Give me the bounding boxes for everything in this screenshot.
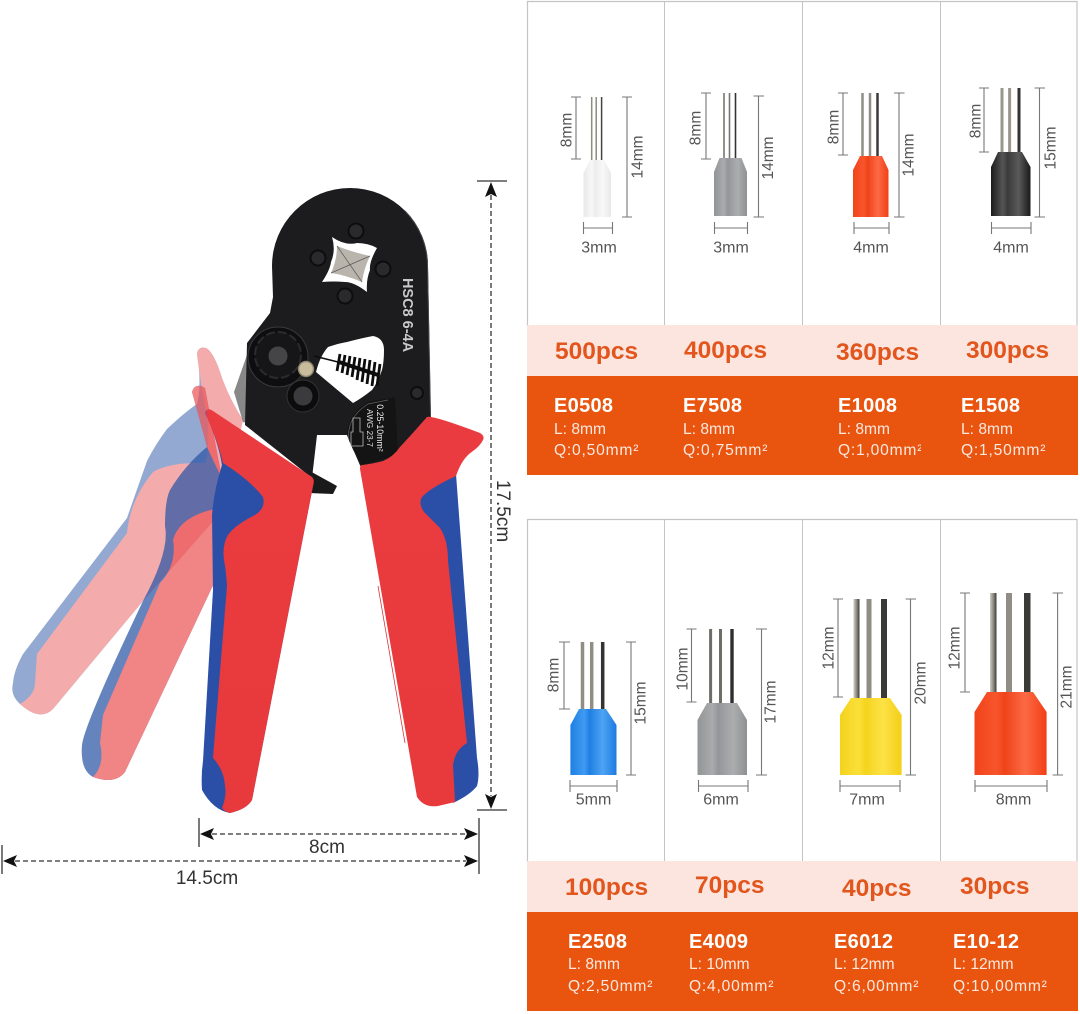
pliers illustration: [12, 188, 484, 813]
quantity band: upper row: [527, 325, 1078, 376]
quantity band: lower row: 30pcs: [960, 873, 1029, 900]
ferrule E6012 yellow: 12mm: [820, 626, 838, 670]
ferrule E7508 grey: [688, 93, 777, 256]
quantity band: upper row: 360pcs: [836, 339, 919, 366]
spec E4009: Q:4,00mm²: [689, 978, 774, 995]
adjusting wheel: [248, 327, 314, 387]
ghost handle: outermost open position: [12, 348, 243, 714]
dimension: width 8cm: [199, 818, 479, 874]
ferrule E2508 blue: 5mm: [576, 792, 611, 808]
spring: [314, 354, 380, 386]
spec band: upper row: [527, 376, 1078, 475]
ferrule E6012 yellow: 7mm: [849, 792, 885, 808]
ferrule E1008 red: 14mm: [900, 133, 918, 177]
quantity band: upper row: 400pcs: [684, 337, 767, 364]
spec E2508: [568, 931, 653, 995]
ferrule E6012 yellow: [820, 599, 930, 808]
ferrule E6012 yellow: 20mm: [912, 661, 930, 705]
ferrule E10-12 red: 8mm: [996, 792, 1031, 808]
quantity band: lower row: 100pcs: [565, 874, 648, 901]
panel: lower ferrule sizes: [528, 519, 1077, 862]
spec E1008: [838, 395, 923, 459]
dimension: width 8cm: 8cm: [309, 837, 345, 858]
spec E0508: Q:0,50mm²: [554, 442, 639, 459]
right handle: [360, 417, 484, 806]
quantity band: lower row: 70pcs: [695, 872, 764, 899]
crimping die opening: [322, 237, 377, 292]
panel: upper ferrule sizes: [528, 1, 1077, 326]
spec E7508: [683, 395, 768, 459]
head edge highlight: [405, 211, 430, 415]
spec E2508: E2508: [568, 931, 627, 953]
spring window: [316, 336, 384, 403]
spec E1008: L: 8mm: [838, 421, 890, 438]
quantity band: upper row: 300pcs: [966, 337, 1049, 364]
spec E1008: Q:1,00mm²: [838, 442, 923, 459]
ferrule E0508 white: [558, 97, 646, 256]
ferrule E1008 red: [826, 93, 918, 256]
ghost handle: middle open position: [82, 386, 225, 780]
spec E0508: L: 8mm: [554, 421, 606, 438]
wire range marking: AWG 23-7: [365, 409, 374, 447]
die screws: [310, 224, 423, 399]
spec E6012: L: 12mm: [834, 956, 895, 973]
pivot bolt: [287, 380, 319, 412]
spec E1508: E1508: [961, 395, 1020, 417]
ferrule E1508 black: 4mm: [993, 240, 1029, 256]
dimension: height 17.5cm: 17.5cm: [492, 480, 513, 542]
ferrule E2508 blue: 8mm: [546, 658, 562, 692]
small lever tab: [308, 470, 337, 494]
plier head and jaw body: [245, 188, 431, 478]
ferrule E10-12 red: 21mm: [1058, 665, 1076, 709]
spec E7508: L: 8mm: [683, 421, 735, 438]
spec E10-12: L: 12mm: [953, 956, 1014, 973]
left handle: [202, 409, 314, 813]
model text on head: HSC8 6-4A: [399, 278, 415, 353]
spec E6012: [834, 931, 919, 995]
spec E4009: [689, 931, 774, 995]
spec band: lower row: [527, 912, 1078, 1011]
spec E2508: Q:2,50mm²: [568, 978, 653, 995]
spec E4009: E4009: [689, 931, 748, 953]
spec E6012: E6012: [834, 931, 893, 953]
spec E1508: [961, 395, 1046, 459]
ferrule E7508 grey: 14mm: [760, 136, 777, 180]
dimension: height 17.5cm: [477, 181, 513, 810]
wire range marking: [347, 397, 398, 465]
dimension: open width 14.5cm: 14.5cm: [176, 868, 238, 889]
ferrule E1508 black: [968, 88, 1060, 256]
ferrule E4009 grey: 10mm: [674, 647, 692, 691]
ferrule E1008 red: 4mm: [853, 240, 889, 256]
ferrule E7508 grey: 8mm: [688, 111, 704, 145]
ferrule E4009 grey: 6mm: [703, 792, 739, 808]
ferrule E2508 blue: [546, 642, 650, 808]
spec E0508: [554, 395, 639, 459]
spec E1508: L: 8mm: [961, 421, 1013, 438]
ferrule E10-12 red: 12mm: [946, 626, 964, 670]
spec E10-12: E10-12: [953, 931, 1019, 953]
spec E10-12: [953, 931, 1048, 995]
spec E2508: L: 8mm: [568, 956, 620, 973]
spec E7508: Q:0,75mm²: [683, 442, 768, 459]
ghost jaw: [234, 352, 250, 424]
ferrule E0508 white: 3mm: [581, 240, 617, 256]
wire range marking: 0.25-10mm²: [375, 404, 385, 452]
spec E4009: L: 10mm: [689, 956, 750, 973]
ferrule E1508 black: 8mm: [968, 104, 984, 138]
spec E1508: Q:1,50mm²: [961, 442, 1046, 459]
ferrule E4009 grey: 17mm: [762, 680, 780, 724]
spec E10-12: Q:10,00mm²: [953, 978, 1048, 995]
spec E6012: Q:6,00mm²: [834, 978, 919, 995]
spec E7508: E7508: [683, 395, 742, 417]
spec E0508: E0508: [554, 395, 613, 417]
ferrule E4009 grey: [674, 629, 780, 808]
dimension: open width 14.5cm: [2, 845, 478, 889]
quantity band: upper row: 500pcs: [555, 338, 638, 365]
ferrule E0508 white: 8mm: [558, 113, 576, 147]
ferrule E2508 blue: 15mm: [632, 681, 650, 725]
ferrule E0508 white: 14mm: [630, 135, 646, 179]
quantity band: lower row: 40pcs: [842, 875, 911, 902]
quantity band: lower row: [527, 861, 1078, 912]
ferrule E1508 black: 15mm: [1042, 126, 1060, 170]
spec E1008: E1008: [838, 395, 897, 417]
ferrule E1008 red: 8mm: [826, 110, 842, 144]
ferrule E7508 grey: 3mm: [713, 240, 749, 256]
ferrule E10-12 red: [946, 593, 1076, 808]
